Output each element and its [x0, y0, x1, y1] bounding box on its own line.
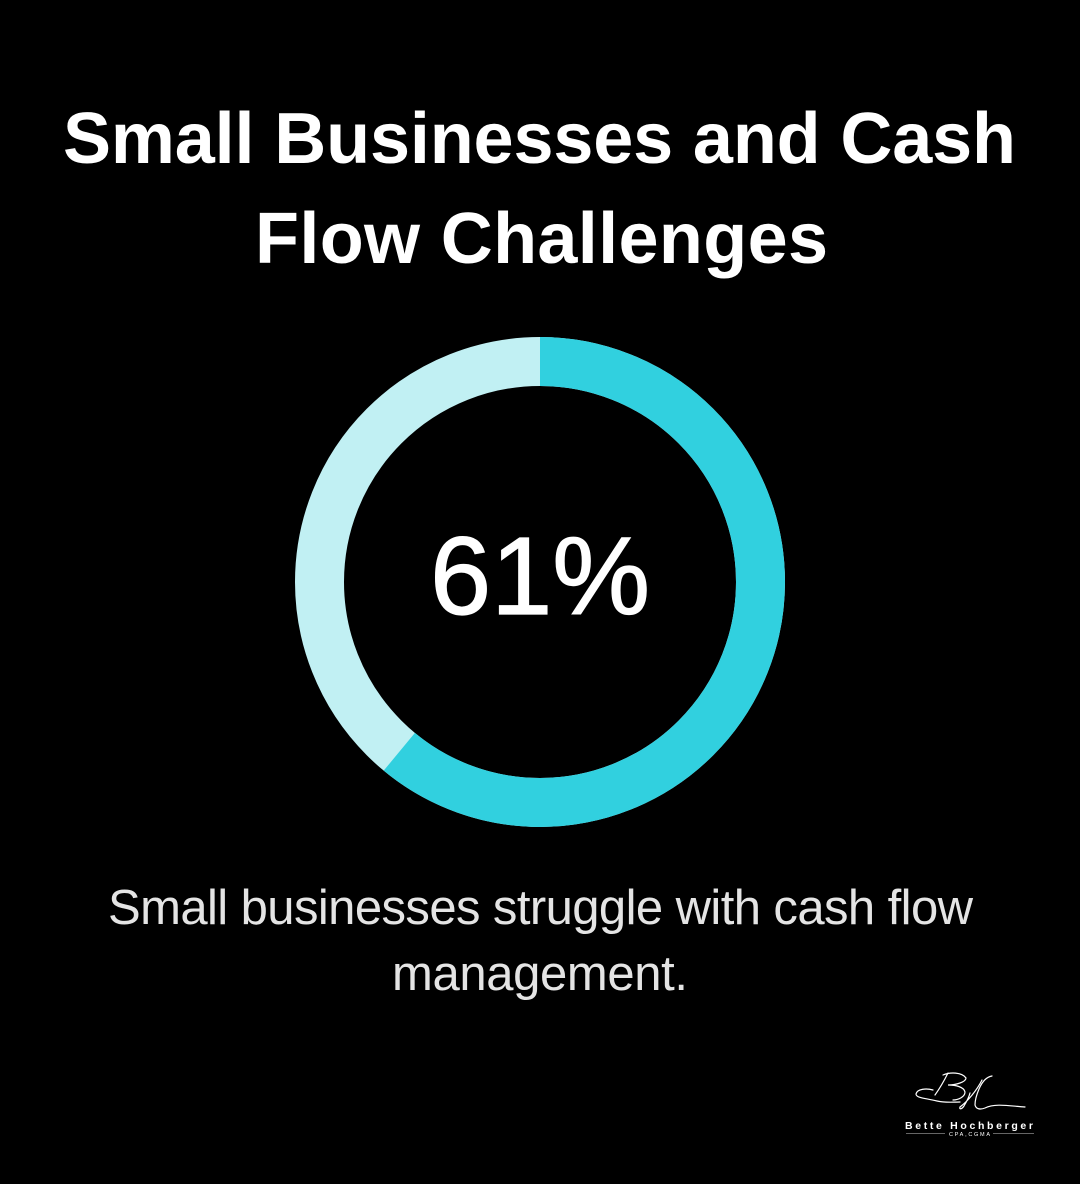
center value: 61%: [430, 515, 650, 638]
logo: Bette Hochberger signature: [905, 1073, 1034, 1138]
title: Small Businesses and Cash: [63, 99, 1016, 179]
description text: Small businesses struggle with cash flow: [108, 881, 974, 935]
title: [63, 99, 1016, 279]
donut chart: 61%: [320, 362, 760, 802]
title: Flow Challenges: [255, 199, 828, 279]
logo: Bette Hochberger signature: Bette Hochberger: [905, 1120, 1033, 1132]
description text: [108, 881, 974, 1001]
description text: management.: [392, 947, 688, 1001]
logo: Bette Hochberger signature: CPA,CGMA: [949, 1132, 990, 1138]
